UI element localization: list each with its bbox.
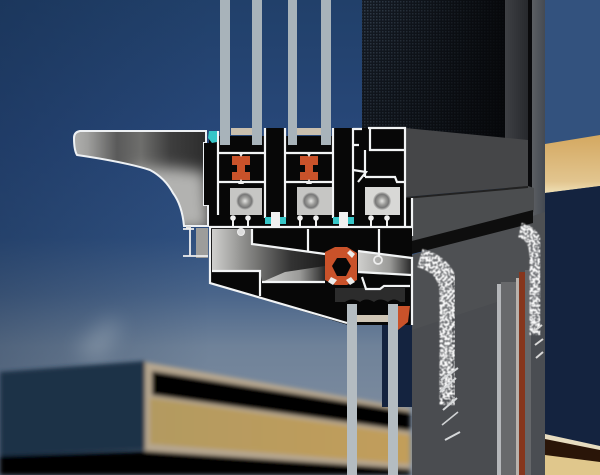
orange gasket [398, 306, 410, 330]
black seal with bumps [335, 288, 405, 302]
upper glass panes [220, 0, 331, 145]
frame walls [218, 128, 412, 236]
sealant strips [420, 230, 543, 440]
fasteners [230, 212, 390, 227]
black shadow slot [400, 210, 533, 256]
sill nose profile [74, 131, 210, 230]
top extrusion face [405, 128, 534, 247]
facade panel: glazing mesh and frame [362, 0, 545, 475]
profile walls [209, 227, 412, 325]
navy reveal behind lower glass [382, 325, 412, 407]
grey cavity left [212, 229, 325, 282]
black lower body [210, 227, 412, 325]
black frame body [204, 128, 412, 235]
thermal break, sash 1 [232, 156, 250, 180]
lower glass panes [347, 304, 398, 475]
background building: dark block, black beam and gold band [0, 361, 410, 475]
cyan gaskets [208, 131, 354, 224]
lower jamb: grey extrusion with red gasket [412, 212, 545, 475]
thermal break, sash 2 [300, 156, 318, 180]
upper frame profile [204, 0, 412, 236]
lower sill profile [209, 227, 412, 325]
small left bracket [183, 228, 208, 258]
sealant: left strip [420, 258, 460, 440]
hardware blocks [230, 188, 262, 215]
background right: sky, gold band and navy wall [545, 0, 600, 475]
grey cavity right [358, 251, 411, 275]
spacers [231, 128, 252, 135]
central thermal break [325, 247, 357, 285]
sealant: right strip [520, 230, 543, 358]
